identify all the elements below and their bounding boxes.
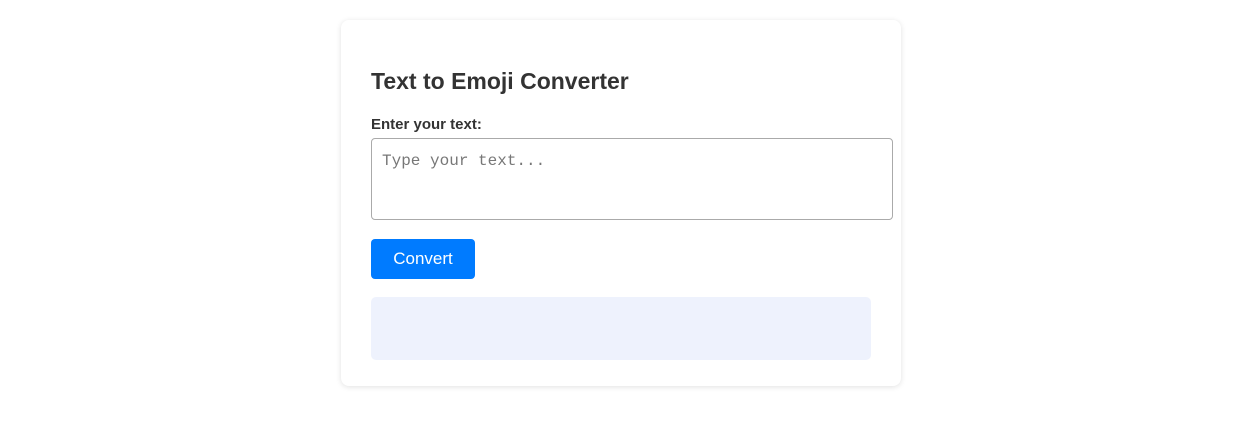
title: Text to Emoji Converter [371, 68, 629, 94]
panel: converter card [341, 20, 901, 386]
label: Enter your text: [371, 116, 482, 133]
button: convert [371, 239, 475, 279]
textarea [371, 138, 893, 220]
result box [371, 297, 871, 360]
textarea: Type your text... [382, 152, 545, 170]
button: convert: Convert [393, 249, 453, 268]
